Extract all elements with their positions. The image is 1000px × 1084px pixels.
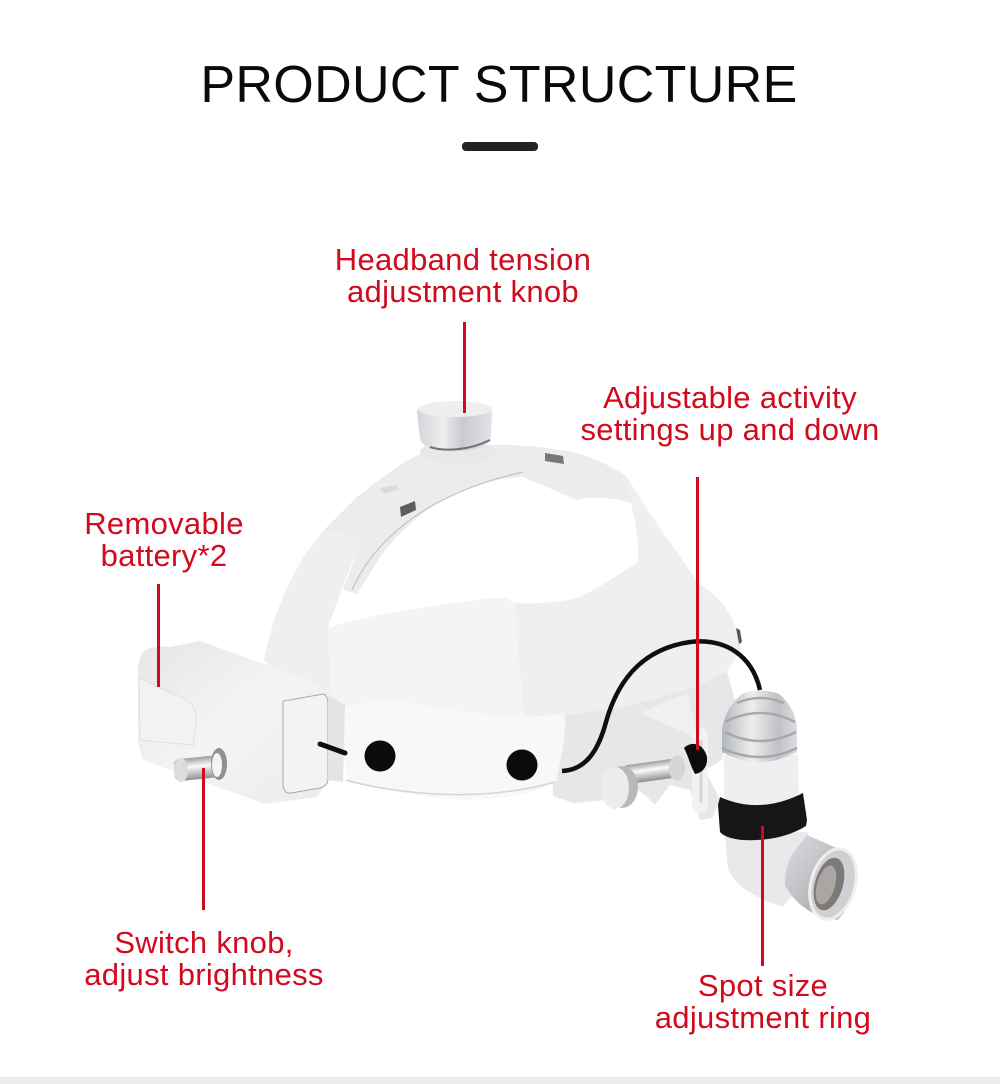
headband left strap: [264, 531, 362, 700]
callout: spot size ring: Spot size: [698, 968, 828, 1003]
battery box: [138, 641, 345, 804]
headband top arc plate: [323, 445, 742, 644]
metal dome: [722, 690, 797, 762]
lamp elbow: [725, 832, 820, 907]
lamp body: [724, 755, 799, 812]
pointer: switch knob: [202, 768, 205, 910]
title: PRODUCT STRUCTURE: [200, 56, 798, 114]
pointer: battery: [157, 584, 160, 687]
black cable: [562, 641, 760, 771]
black pad: [684, 744, 707, 774]
switch knob: [173, 748, 227, 782]
callout: adjustable activity: settings up and down: [580, 412, 880, 447]
callout: switch knob: adjust brightness: [84, 957, 324, 992]
front hard strap and bracket: [553, 672, 735, 820]
lens barrel: [785, 835, 857, 920]
bottom strip: [0, 1077, 1000, 1084]
pointer: spot size ring: [761, 826, 764, 966]
lamp head: [718, 690, 864, 925]
callout: switch knob: [84, 925, 324, 992]
rear padded leather strap: [328, 598, 525, 722]
callout: spot size ring: adjustment ring: [655, 1000, 871, 1035]
black ring: [718, 793, 807, 840]
callout: adjustable activity: Adjustable activity: [603, 380, 857, 415]
callout: headband tension knob: [335, 242, 591, 309]
callout: removable battery: battery*2: [101, 538, 227, 573]
leather snap left: [364, 740, 396, 772]
title underline bar: [462, 142, 538, 151]
front padded leather strap: [343, 702, 565, 800]
tension adjustment knob: [417, 401, 496, 464]
callout: headband tension knob: adjustment knob: [347, 274, 579, 309]
pointer: adjustable activity: [696, 477, 699, 750]
callout: spot size ring: [655, 968, 871, 1035]
pointer: headband knob: [463, 322, 466, 413]
callout: headband tension knob: Headband tension: [335, 242, 591, 277]
callout: switch knob: Switch knob,: [114, 925, 294, 960]
leather snap right: [506, 750, 538, 780]
headband right strap: [515, 477, 741, 725]
callout: removable battery: Removable: [84, 506, 244, 541]
callout: removable battery: [84, 506, 244, 573]
callout: adjustable activity: [580, 380, 880, 447]
bracket knob and screw: [601, 744, 707, 809]
